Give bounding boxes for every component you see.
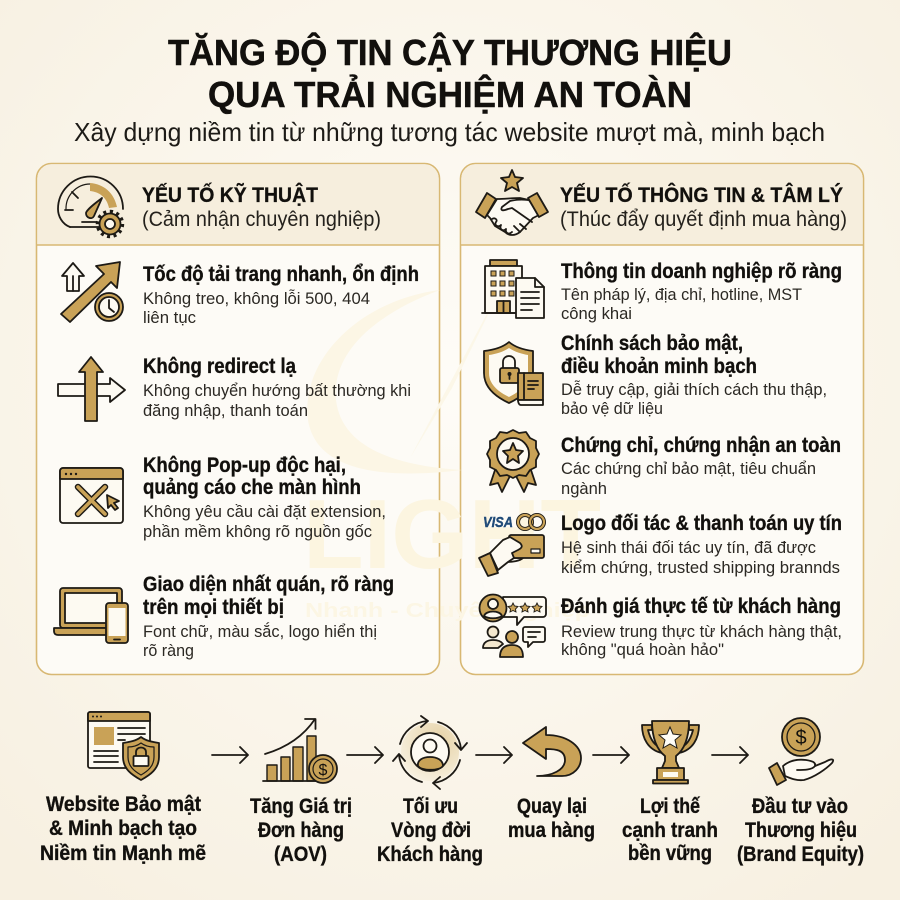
- icon: return arrow: [523, 727, 581, 776]
- title: QUA TRẢI NGHIỆM AN TOÀN: [208, 73, 692, 115]
- flow step 2: order value: Đơn hàng: [258, 819, 344, 842]
- flow step 1: secure website: Niềm tin Mạnh mẽ: [40, 842, 206, 865]
- flow step 6: brand equity: Đầu tư vào: [752, 795, 848, 818]
- item: consistent interface: Font chữ, màu sắc, logo hiển thị: [143, 622, 377, 641]
- flow step 3: customer lifecycle: [377, 716, 483, 866]
- arrow: step 4 to 5: [593, 747, 629, 763]
- icon: hand holding coin: $: [795, 727, 807, 749]
- item: safety certificates: [487, 430, 841, 498]
- flow step 6: brand equity: [737, 718, 864, 866]
- item: partner and payment logos: kiểm chứng, trusted shipping brannds: [561, 558, 840, 577]
- icon: trophy: [642, 721, 699, 784]
- item: partner and payment logos: [479, 512, 842, 577]
- icon: website with shield: [88, 712, 159, 780]
- flow step 2: order value: [250, 719, 352, 866]
- item: business information: Tên pháp lý, địa chỉ, hotline, MST: [561, 285, 802, 304]
- icon: building and document: [482, 260, 544, 318]
- flow step 6: brand equity: Thương hiệu: [745, 819, 857, 842]
- icon: reviewers and stars: [480, 594, 546, 657]
- title: TĂNG ĐỘ TIN CẬY THƯƠNG HIỆU: [168, 31, 732, 73]
- panel: technical factors background: [36, 164, 440, 674]
- flow step 2: order value: Tăng Giá trị: [250, 795, 352, 818]
- watermark logo: LIGHT: [303, 479, 601, 589]
- panel: information and psychology background: [460, 164, 864, 674]
- icon: visa, card and hand: VISA: [483, 514, 513, 531]
- flow step 1: secure website: [40, 712, 206, 865]
- item: privacy policy: [484, 332, 827, 418]
- item: consistent interface: rõ ràng: [143, 641, 194, 660]
- flow step 2: order value: (AOV): [274, 843, 327, 866]
- icon: award medal: [487, 430, 539, 492]
- item: privacy policy: bảo vệ dữ liệu: [561, 399, 663, 418]
- subheading: technical factors: (Cảm nhận chuyên nghiệp): [142, 208, 381, 231]
- icon: bar chart with coin: $: [319, 762, 328, 779]
- item: page speed: Tốc độ tải trang nhanh, ổn định: [143, 263, 419, 286]
- item: partner and payment logos: Hệ sinh thái đối tác uy tín, đã được: [561, 538, 816, 557]
- flow step 1: secure website: & Minh bạch tạo: [49, 817, 197, 840]
- item: page speed: Không treo, không lỗi 500, 404: [143, 289, 370, 308]
- item: business information: [482, 260, 842, 323]
- flow step 5: competitive advantage: [622, 721, 718, 865]
- heading: information factors: YẾU TỐ THÔNG TIN & TÂM LÝ: [560, 183, 843, 207]
- flow step 5: competitive advantage: Lợi thế: [640, 795, 700, 818]
- item: consistent interface: [54, 573, 394, 660]
- item: no malicious pop-ups: [60, 454, 386, 541]
- item: customer reviews: [480, 594, 842, 659]
- item: customer reviews: Đánh giá thực tế từ khách hàng: [561, 595, 841, 618]
- title: [168, 31, 732, 115]
- item: privacy policy: Chính sách bảo mật,: [561, 332, 743, 355]
- subtitle: Xây dựng niềm tin từ những tương tác website mượt mà, minh bạch: [74, 117, 825, 147]
- watermark logo: [303, 280, 601, 622]
- icon: shield with lock and book: [484, 342, 543, 405]
- item: no strange redirect: đăng nhập, thanh toán: [143, 401, 308, 420]
- item: no strange redirect: [58, 355, 411, 421]
- item: no strange redirect: Không chuyển hướng bất thường khi: [143, 381, 411, 400]
- icon: handshake with star: [476, 170, 548, 235]
- item: customer reviews: Review trung thực từ khách hàng thật,: [561, 622, 842, 641]
- heading: technical factors: YẾU TỐ KỸ THUẬT: [142, 183, 318, 207]
- icon: speed arrow and clock: [61, 262, 123, 322]
- item: no malicious pop-ups: Không yêu cầu cài đặt extension,: [143, 502, 386, 521]
- item: customer reviews: không "quá hoàn hảo": [561, 640, 724, 659]
- item: no malicious pop-ups: phần mềm không rõ nguồn gốc: [143, 522, 372, 541]
- item: business information: Thông tin doanh nghiệp rõ ràng: [561, 260, 842, 283]
- item: consistent interface: Giao diện nhất quán, rõ ràng: [143, 573, 394, 596]
- item: no malicious pop-ups: quảng cáo che màn hình: [143, 476, 361, 499]
- item: privacy policy: Dễ truy cập, giải thích cách thu thập,: [561, 380, 827, 399]
- item: safety certificates: Các chứng chỉ bảo mật, tiêu chuẩn: [561, 459, 816, 478]
- icon: hand holding coin: [769, 718, 833, 785]
- icon: bar chart with coin: [263, 719, 337, 783]
- item: no malicious pop-ups: Không Pop-up độc hại,: [143, 454, 346, 477]
- icon: laptop and phone: [54, 588, 128, 643]
- flow step 5: competitive advantage: cạnh tranh: [622, 819, 718, 842]
- flow step 3: customer lifecycle: Vòng đời: [391, 819, 471, 842]
- icon: customer in cycle: [393, 716, 467, 789]
- subheading: information factors: (Thúc đẩy quyết định mua hàng): [560, 208, 847, 231]
- item: page speed: liên tục: [143, 308, 196, 327]
- flow step 1: secure website: Website Bảo mật: [46, 793, 201, 816]
- flow step 4: repeat purchase: Quay lại: [517, 795, 587, 818]
- item: consistent interface: trên mọi thiết bị: [143, 596, 284, 619]
- icon: browser window with cross: [60, 468, 123, 523]
- item: privacy policy: điều khoản minh bạch: [561, 355, 757, 378]
- flow step 4: repeat purchase: [508, 727, 595, 842]
- item: safety certificates: ngành: [561, 479, 607, 498]
- icon: speedometer and gear: [58, 177, 123, 236]
- flow step 6: brand equity: (Brand Equity): [737, 843, 864, 866]
- item: partner and payment logos: Logo đối tác & thanh toán uy tín: [561, 512, 842, 535]
- left panel header: [58, 177, 381, 236]
- right panel header: [476, 170, 847, 235]
- arrow: step 1 to 2: [212, 747, 248, 763]
- icon: visa, card and hand: [479, 514, 544, 576]
- item: no strange redirect: Không redirect lạ: [143, 355, 296, 378]
- item: page speed: [61, 262, 419, 327]
- flow step 3: customer lifecycle: Tối ưu: [403, 795, 458, 818]
- item: safety certificates: Chứng chỉ, chứng nhận an toàn: [561, 434, 841, 457]
- arrow: step 2 to 3: [347, 747, 383, 763]
- flow step 4: repeat purchase: mua hàng: [508, 819, 595, 842]
- arrow: step 5 to 6: [712, 747, 748, 763]
- watermark logo: Nhanh - Chuyên Nghiệp: [305, 600, 590, 622]
- flow step 5: competitive advantage: bền vững: [628, 842, 712, 865]
- icon: crossing arrows: [58, 357, 125, 421]
- item: business information: công khai: [561, 304, 632, 323]
- arrow: step 3 to 4: [476, 747, 512, 763]
- flow step 3: customer lifecycle: Khách hàng: [377, 843, 483, 866]
